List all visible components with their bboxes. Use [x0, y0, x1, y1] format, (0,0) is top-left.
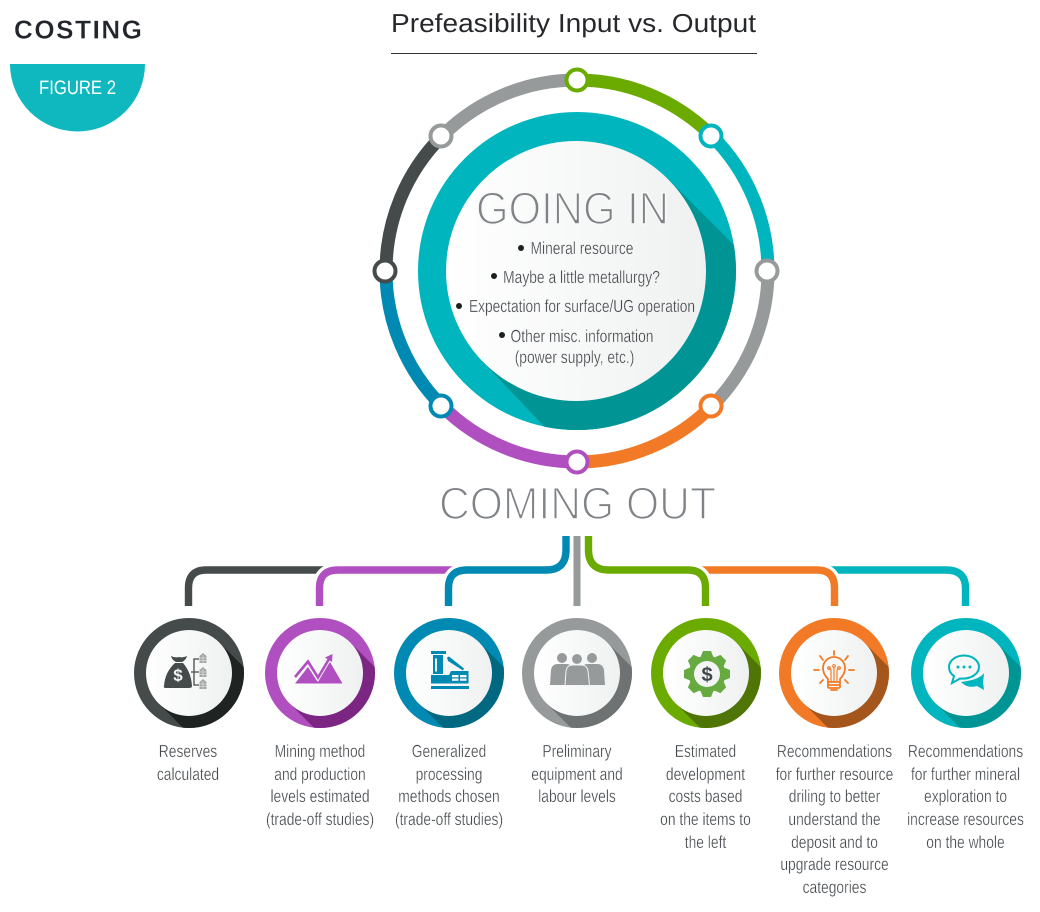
ring segment: dark [386, 136, 442, 271]
caption: resource drilling: categories [803, 877, 867, 897]
caption: development [660, 741, 751, 852]
ring segment: teal [712, 136, 768, 271]
caption: resource drilling: for further resource [776, 764, 893, 784]
caption: resource drilling: driling to better [789, 786, 880, 806]
caption: resource drilling: understand the [788, 809, 881, 829]
caption: mineral exploration: for further mineral [911, 764, 1020, 784]
connector: development [588, 536, 706, 606]
caption: development: Estimated [675, 741, 736, 761]
connectors [188, 536, 966, 606]
heading: COMING OUT: COMING OUT [439, 478, 716, 529]
ring segment: blue [386, 271, 442, 406]
caption: mining: Mining method [275, 741, 365, 761]
ring segment: green [577, 80, 712, 136]
caption: resource drilling: upgrade resource [780, 854, 889, 874]
icon: money bag with buildings: $ [173, 666, 183, 685]
caption: development: costs based [669, 786, 742, 806]
caption: processing: processing [416, 764, 482, 784]
caption: mining: and production [274, 764, 366, 784]
caption: reserves [157, 741, 219, 784]
caption: mining [266, 741, 374, 829]
caption: reserves: calculated [157, 764, 219, 784]
caption: mineral exploration: increase resources [907, 809, 1024, 829]
badge: processing [394, 618, 504, 728]
list: inputs: Mineral resource [531, 238, 633, 258]
icon: gear with dollar [684, 651, 730, 697]
ring segment: orange [577, 406, 712, 462]
list: inputs [456, 238, 695, 367]
ring segment: grey top [442, 80, 577, 136]
caption: processing: methods chosen [398, 786, 500, 806]
caption: mineral exploration: Recommendations [908, 741, 1023, 761]
caption: resource drilling [776, 741, 893, 897]
badge: mining [265, 618, 375, 728]
icon: three people [550, 653, 605, 686]
badge: equipment and labour [522, 618, 632, 728]
badge: reserves [134, 618, 244, 728]
list: inputs: (power supply, etc.) [515, 347, 634, 367]
caption: equipment: Preliminary [542, 741, 612, 761]
caption: processing [395, 741, 503, 829]
icon: processing plant [431, 651, 469, 689]
badge: FIGURE 2 [10, 64, 145, 131]
caption: development: on the items to [660, 809, 751, 829]
list: inputs: Other misc. information [511, 326, 653, 346]
icon: mountain with trend arrow [295, 654, 342, 684]
caption: resource drilling: deposit and to [791, 832, 878, 852]
connector: reserves [188, 570, 330, 606]
caption: equipment: equipment and [531, 764, 623, 784]
caption: processing: Generalized [412, 741, 486, 761]
icon: speech bubbles [949, 656, 984, 690]
ring segment: grey right [712, 271, 768, 406]
caption: processing: (trade-off studies) [395, 809, 503, 829]
caption: mineral exploration: exploration to [924, 786, 1007, 806]
badge: mineral exploration [911, 618, 1021, 728]
caption: development: the left [685, 832, 726, 852]
connector: equipment [574, 536, 580, 606]
connector: resource drilling [695, 570, 834, 606]
central circle: going in [418, 112, 736, 430]
ring segment: purple [442, 406, 577, 462]
caption: equipment [531, 741, 623, 806]
badge: development costs [651, 618, 761, 728]
list: inputs: Expectation for surface/UG operation [469, 296, 695, 316]
caption: mining: levels estimated [270, 786, 370, 806]
title: Prefeasibility Input vs. Output [391, 8, 757, 38]
icon: gear with dollar: $ [701, 664, 713, 686]
icon: light bulb [814, 651, 854, 690]
caption: mineral exploration: on the whole [926, 832, 1005, 852]
section label: COSTING: COSTING [14, 14, 142, 44]
list: inputs: Maybe a little metallurgy? [503, 267, 660, 287]
connector: processing [448, 536, 566, 606]
ring nodes [374, 70, 778, 472]
caption: development: development [666, 764, 745, 784]
badge: FIGURE 2: FIGURE 2 [39, 77, 116, 99]
connector: mining [320, 570, 460, 606]
caption: mining: (trade-off studies) [266, 809, 374, 829]
badge: resource drilling [779, 618, 889, 728]
heading: GOING IN: GOING IN [476, 183, 669, 234]
icon: money bag with buildings [164, 653, 207, 689]
caption: resource drilling: Recommendations [777, 741, 892, 761]
caption: mineral exploration [907, 741, 1024, 852]
caption: reserves: Reserves [159, 741, 217, 761]
caption: equipment: labour levels [538, 786, 616, 806]
connector: mineral exploration [826, 570, 966, 606]
outer segmented ring [386, 80, 768, 462]
